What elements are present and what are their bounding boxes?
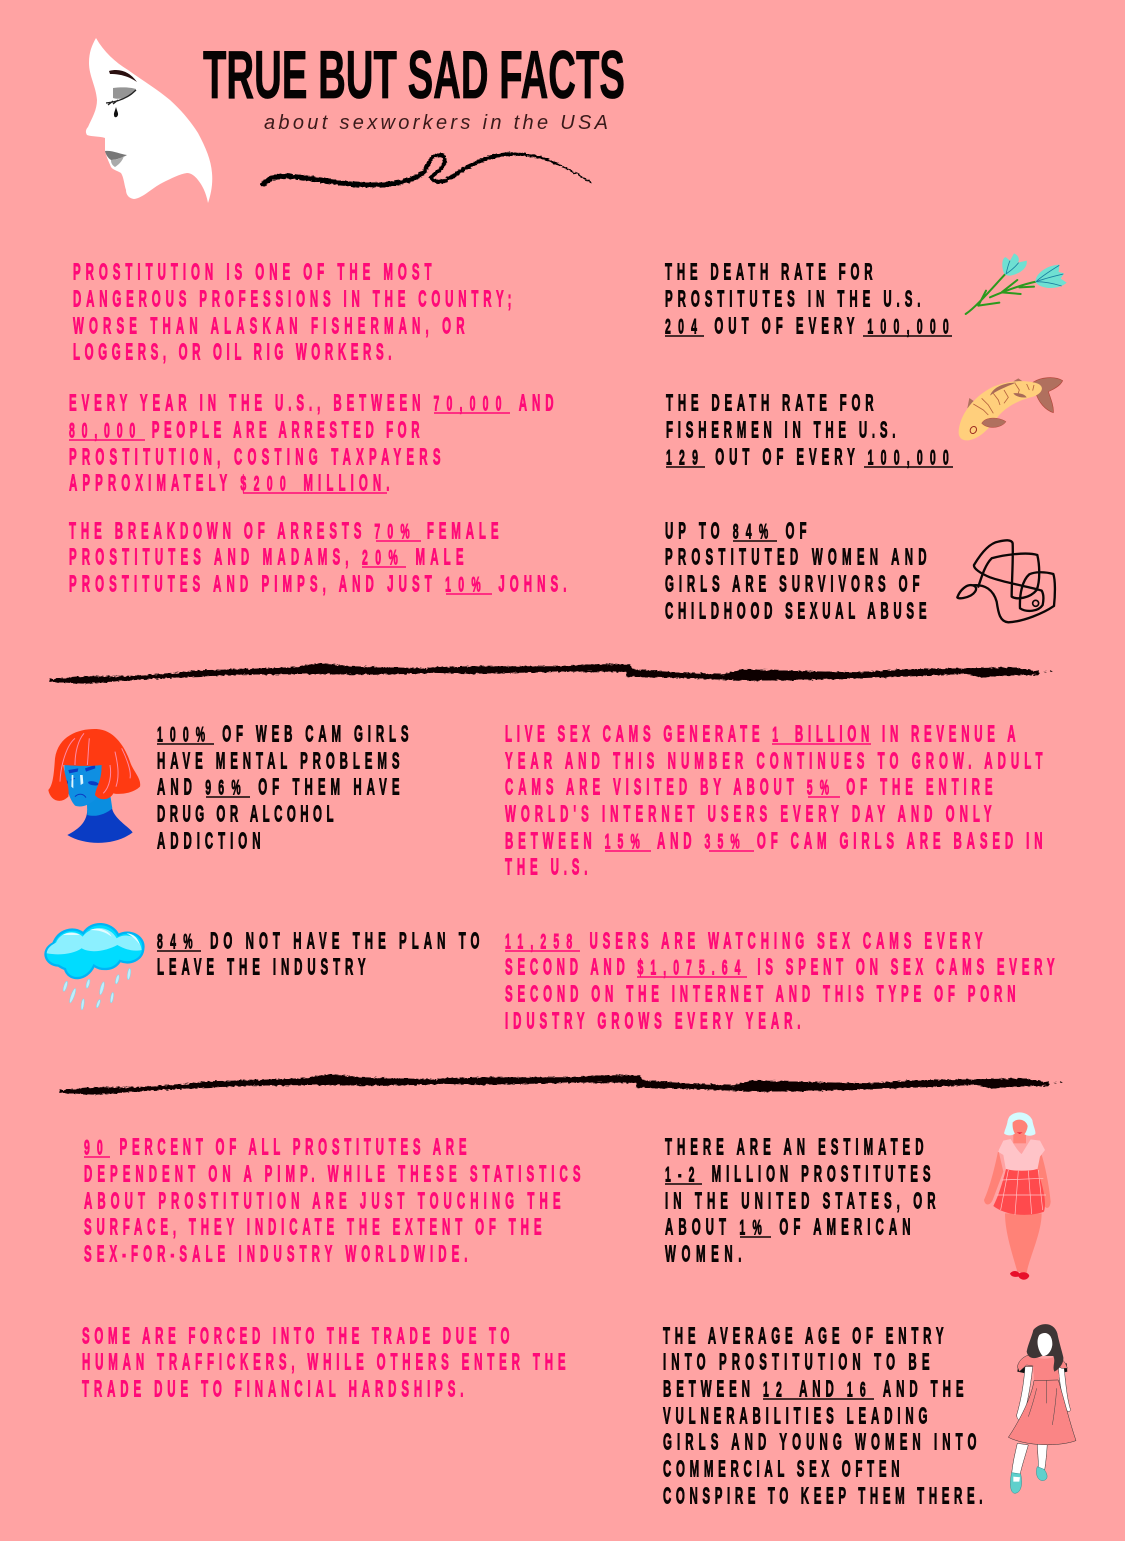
text: dependent on a pimp: DEPENDENT ON A PIMP. WHILE THESE STATISTICS xyxy=(84,1161,580,1187)
text: dependent on a pimp xyxy=(84,1134,580,1267)
text: childhood abuse survivors: UP TO 84% OF xyxy=(665,518,806,544)
decorative flourish under title xyxy=(263,154,591,185)
text: childhood abuse survivors: CHILDHOOD SEXUAL ABUSE xyxy=(665,598,926,624)
text: childhood abuse survivors xyxy=(665,518,926,624)
text: breakdown of arrests: PROSTITUTES AND PIMPS, AND JUST 10% JOHNS. xyxy=(69,571,566,597)
text: breakdown of arrests: PROSTITUTES AND MADAMS, 20% MALE xyxy=(69,544,463,570)
text: estimated number of prostitutes: WOMEN. xyxy=(665,1241,741,1267)
text: average age of entry: INTO PROSTITUTION TO BE xyxy=(663,1349,930,1375)
text: users watching per second: SECOND ON THE INTERNET AND THIS TYPE OF PORN xyxy=(505,981,1016,1007)
text: live sex cams revenue: YEAR AND THIS NUMBER CONTINUES TO GROW. ADULT xyxy=(505,748,1043,774)
text: average age of entry xyxy=(663,1323,982,1509)
text: death rate prostitutes: PROSTITUTES IN THE U.S. xyxy=(665,286,920,312)
text: death rate fishermen: THE DEATH RATE FOR xyxy=(666,390,874,416)
text: users watching per second xyxy=(505,928,1055,1034)
text: estimated number of prostitutes xyxy=(665,1134,935,1267)
text: most dangerous professions: PROSTITUTION IS ONE OF THE MOST xyxy=(73,259,431,285)
text: users watching per second: 11,258 USERS ARE WATCHING SEX CAMS EVERY xyxy=(505,928,982,954)
title: TRUE BUT SAD FACTS xyxy=(203,37,625,113)
text: childhood abuse survivors: GIRLS ARE SURVIVORS OF xyxy=(665,571,920,597)
text: web cam girls mental health: AND 96% OF THEM HAVE xyxy=(157,774,400,800)
text: average age of entry: THE AVERAGE AGE OF ENTRY xyxy=(663,1323,944,1349)
text: most dangerous professions: WORSE THAN ALASKAN FISHERMAN, OR xyxy=(73,313,465,339)
text: death rate prostitutes: THE DEATH RATE FOR xyxy=(665,259,872,285)
text: most dangerous professions: LOGGERS, OR OIL RIG WORKERS. xyxy=(73,339,392,365)
text: death rate fishermen: FISHERMEN IN THE U.S. xyxy=(666,417,895,443)
text: no plan to leave: 84% DO NOT HAVE THE PLAN TO xyxy=(157,928,480,954)
text: live sex cams revenue: THE U.S. xyxy=(505,854,588,880)
text: estimated number of prostitutes: 1-2 MILLION PROSTITUTES xyxy=(665,1161,930,1187)
text: no plan to leave: LEAVE THE INDUSTRY xyxy=(157,954,366,980)
text: annual arrests xyxy=(69,390,553,496)
text: dependent on a pimp: SURFACE, THEY INDICATE THE EXTENT OF THE xyxy=(84,1214,542,1240)
text: users watching per second: SECOND AND $1,075.64 IS SPENT ON SEX CAMS EVERY xyxy=(505,954,1055,980)
text: death rate prostitutes: 204 OUT OF EVERY 100,000 xyxy=(665,313,951,339)
text: average age of entry: CONSPIRE TO KEEP THEM THERE. xyxy=(663,1483,982,1509)
text: web cam girls mental health: HAVE MENTAL PROBLEMS xyxy=(157,748,399,774)
text: breakdown of arrests: THE BREAKDOWN OF ARRESTS 70% FEMALE xyxy=(69,518,499,544)
divider: brush stroke one xyxy=(50,664,1056,683)
text: web cam girls mental health: DRUG OR ALCOHOL xyxy=(157,801,334,827)
text: average age of entry: COMMERCIAL SEX OFTEN xyxy=(663,1456,900,1482)
text: dependent on a pimp: ABOUT PROSTITUTION ARE JUST TOUCHING THE xyxy=(84,1188,561,1214)
text: childhood abuse survivors: PROSTITUTED WOMEN AND xyxy=(665,544,926,570)
icon: woman in plaid skirt xyxy=(984,1112,1051,1280)
text: live sex cams revenue: BETWEEN 15% AND 35% OF CAM GIRLS ARE BASED IN xyxy=(505,828,1043,854)
text: dependent on a pimp: SEX-FOR-SALE INDUSTRY WORLDWIDE. xyxy=(84,1241,467,1267)
text: average age of entry: BETWEEN 12 AND 16 AND THE xyxy=(663,1376,964,1402)
icon: koi fish xyxy=(959,378,1063,440)
text: dependent on a pimp: 90 PERCENT OF ALL PROSTITUTES ARE xyxy=(84,1134,467,1160)
text: death rate prostitutes xyxy=(665,259,952,339)
icon: rain cloud xyxy=(45,924,143,1010)
text: live sex cams revenue: CAMS ARE VISITED BY ABOUT 5% OF THE ENTIRE xyxy=(505,774,992,800)
text: average age of entry: GIRLS AND YOUNG WOMEN INTO xyxy=(663,1429,977,1455)
icon: girl in pink dress xyxy=(1008,1324,1076,1493)
text: web cam girls mental health: 100% OF WEB CAM GIRLS xyxy=(157,721,409,747)
text: web cam girls mental health: ADDICTION xyxy=(157,828,260,854)
text: most dangerous professions: DANGEROUS PROFESSIONS IN THE COUNTRY; xyxy=(73,286,512,312)
divider: brush stroke two xyxy=(60,1075,1066,1094)
text: forced into the trade xyxy=(82,1323,566,1402)
text: annual arrests: APPROXIMATELY $200 MILLION. xyxy=(69,470,390,496)
text: death rate fishermen xyxy=(666,390,953,470)
text: most dangerous professions xyxy=(73,259,512,365)
text: web cam girls mental health xyxy=(157,721,409,854)
text: live sex cams revenue xyxy=(505,721,1043,880)
icon: tangled scribble xyxy=(957,540,1055,622)
text: breakdown of arrests xyxy=(69,518,566,597)
subtitle: about sexworkers in the USA xyxy=(264,112,608,134)
text: estimated number of prostitutes: IN THE UNITED STATES, OR xyxy=(665,1188,935,1214)
text: forced into the trade: TRADE DUE TO FINANCIAL HARDSHIPS. xyxy=(82,1376,464,1402)
text: estimated number of prostitutes: ABOUT 1% OF AMERICAN xyxy=(665,1214,910,1240)
icon: crying woman face profile xyxy=(86,38,212,203)
text: death rate fishermen: 129 OUT OF EVERY 100,000 xyxy=(666,444,951,470)
text: annual arrests: 80,000 PEOPLE ARE ARRESTED FOR xyxy=(69,417,419,443)
text: average age of entry: VULNERABILITIES LEADING xyxy=(663,1403,928,1429)
text: users watching per second: IDUSTRY GROWS EVERY YEAR. xyxy=(505,1008,800,1034)
text: forced into the trade: HUMAN TRAFFICKERS, WHILE OTHERS ENTER THE xyxy=(82,1349,566,1375)
text: live sex cams revenue: WORLD'S INTERNET USERS EVERY DAY AND ONLY xyxy=(505,801,992,827)
text: no plan to leave xyxy=(157,928,480,980)
icon: crying red-haired girl xyxy=(48,729,140,843)
text: live sex cams revenue: LIVE SEX CAMS GENERATE 1 BILLION IN REVENUE A xyxy=(505,721,1016,747)
text: annual arrests: EVERY YEAR IN THE U.S., BETWEEN 70,000 AND xyxy=(69,390,553,416)
icon: teal flowers xyxy=(966,253,1067,314)
text: annual arrests: PROSTITUTION, COSTING TAXPAYERS xyxy=(69,444,440,470)
text: estimated number of prostitutes: THERE ARE AN ESTIMATED xyxy=(665,1134,923,1160)
text: forced into the trade: SOME ARE FORCED INTO THE TRADE DUE TO xyxy=(82,1323,510,1349)
